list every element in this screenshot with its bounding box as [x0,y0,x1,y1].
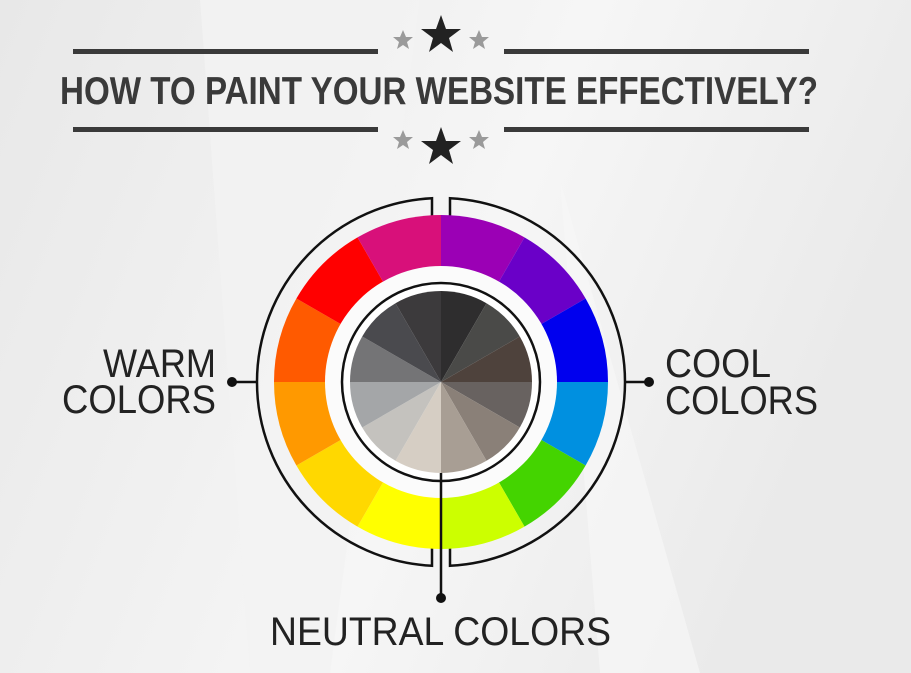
header decoration bottom [73,127,809,164]
label: cool colors: COOL [665,342,771,386]
label: warm colors: COLORS [62,378,216,422]
connector: warm [227,377,257,387]
label: warm colors: WARM [103,342,216,386]
connector: cool [625,377,654,387]
connector: neutral [436,473,446,603]
hue ring [274,215,608,549]
color wheel [257,198,625,566]
label: neutral colors: NEUTRAL COLORS [270,610,611,654]
label: warm colors [62,342,216,422]
label: cool colors: COLORS [665,379,818,423]
neutral circle [350,291,532,473]
icon: stars bottom [393,127,489,164]
outer brackets [257,198,625,566]
label: cool colors [665,342,818,423]
icon: stars top [393,15,489,52]
header decoration top [73,15,809,54]
